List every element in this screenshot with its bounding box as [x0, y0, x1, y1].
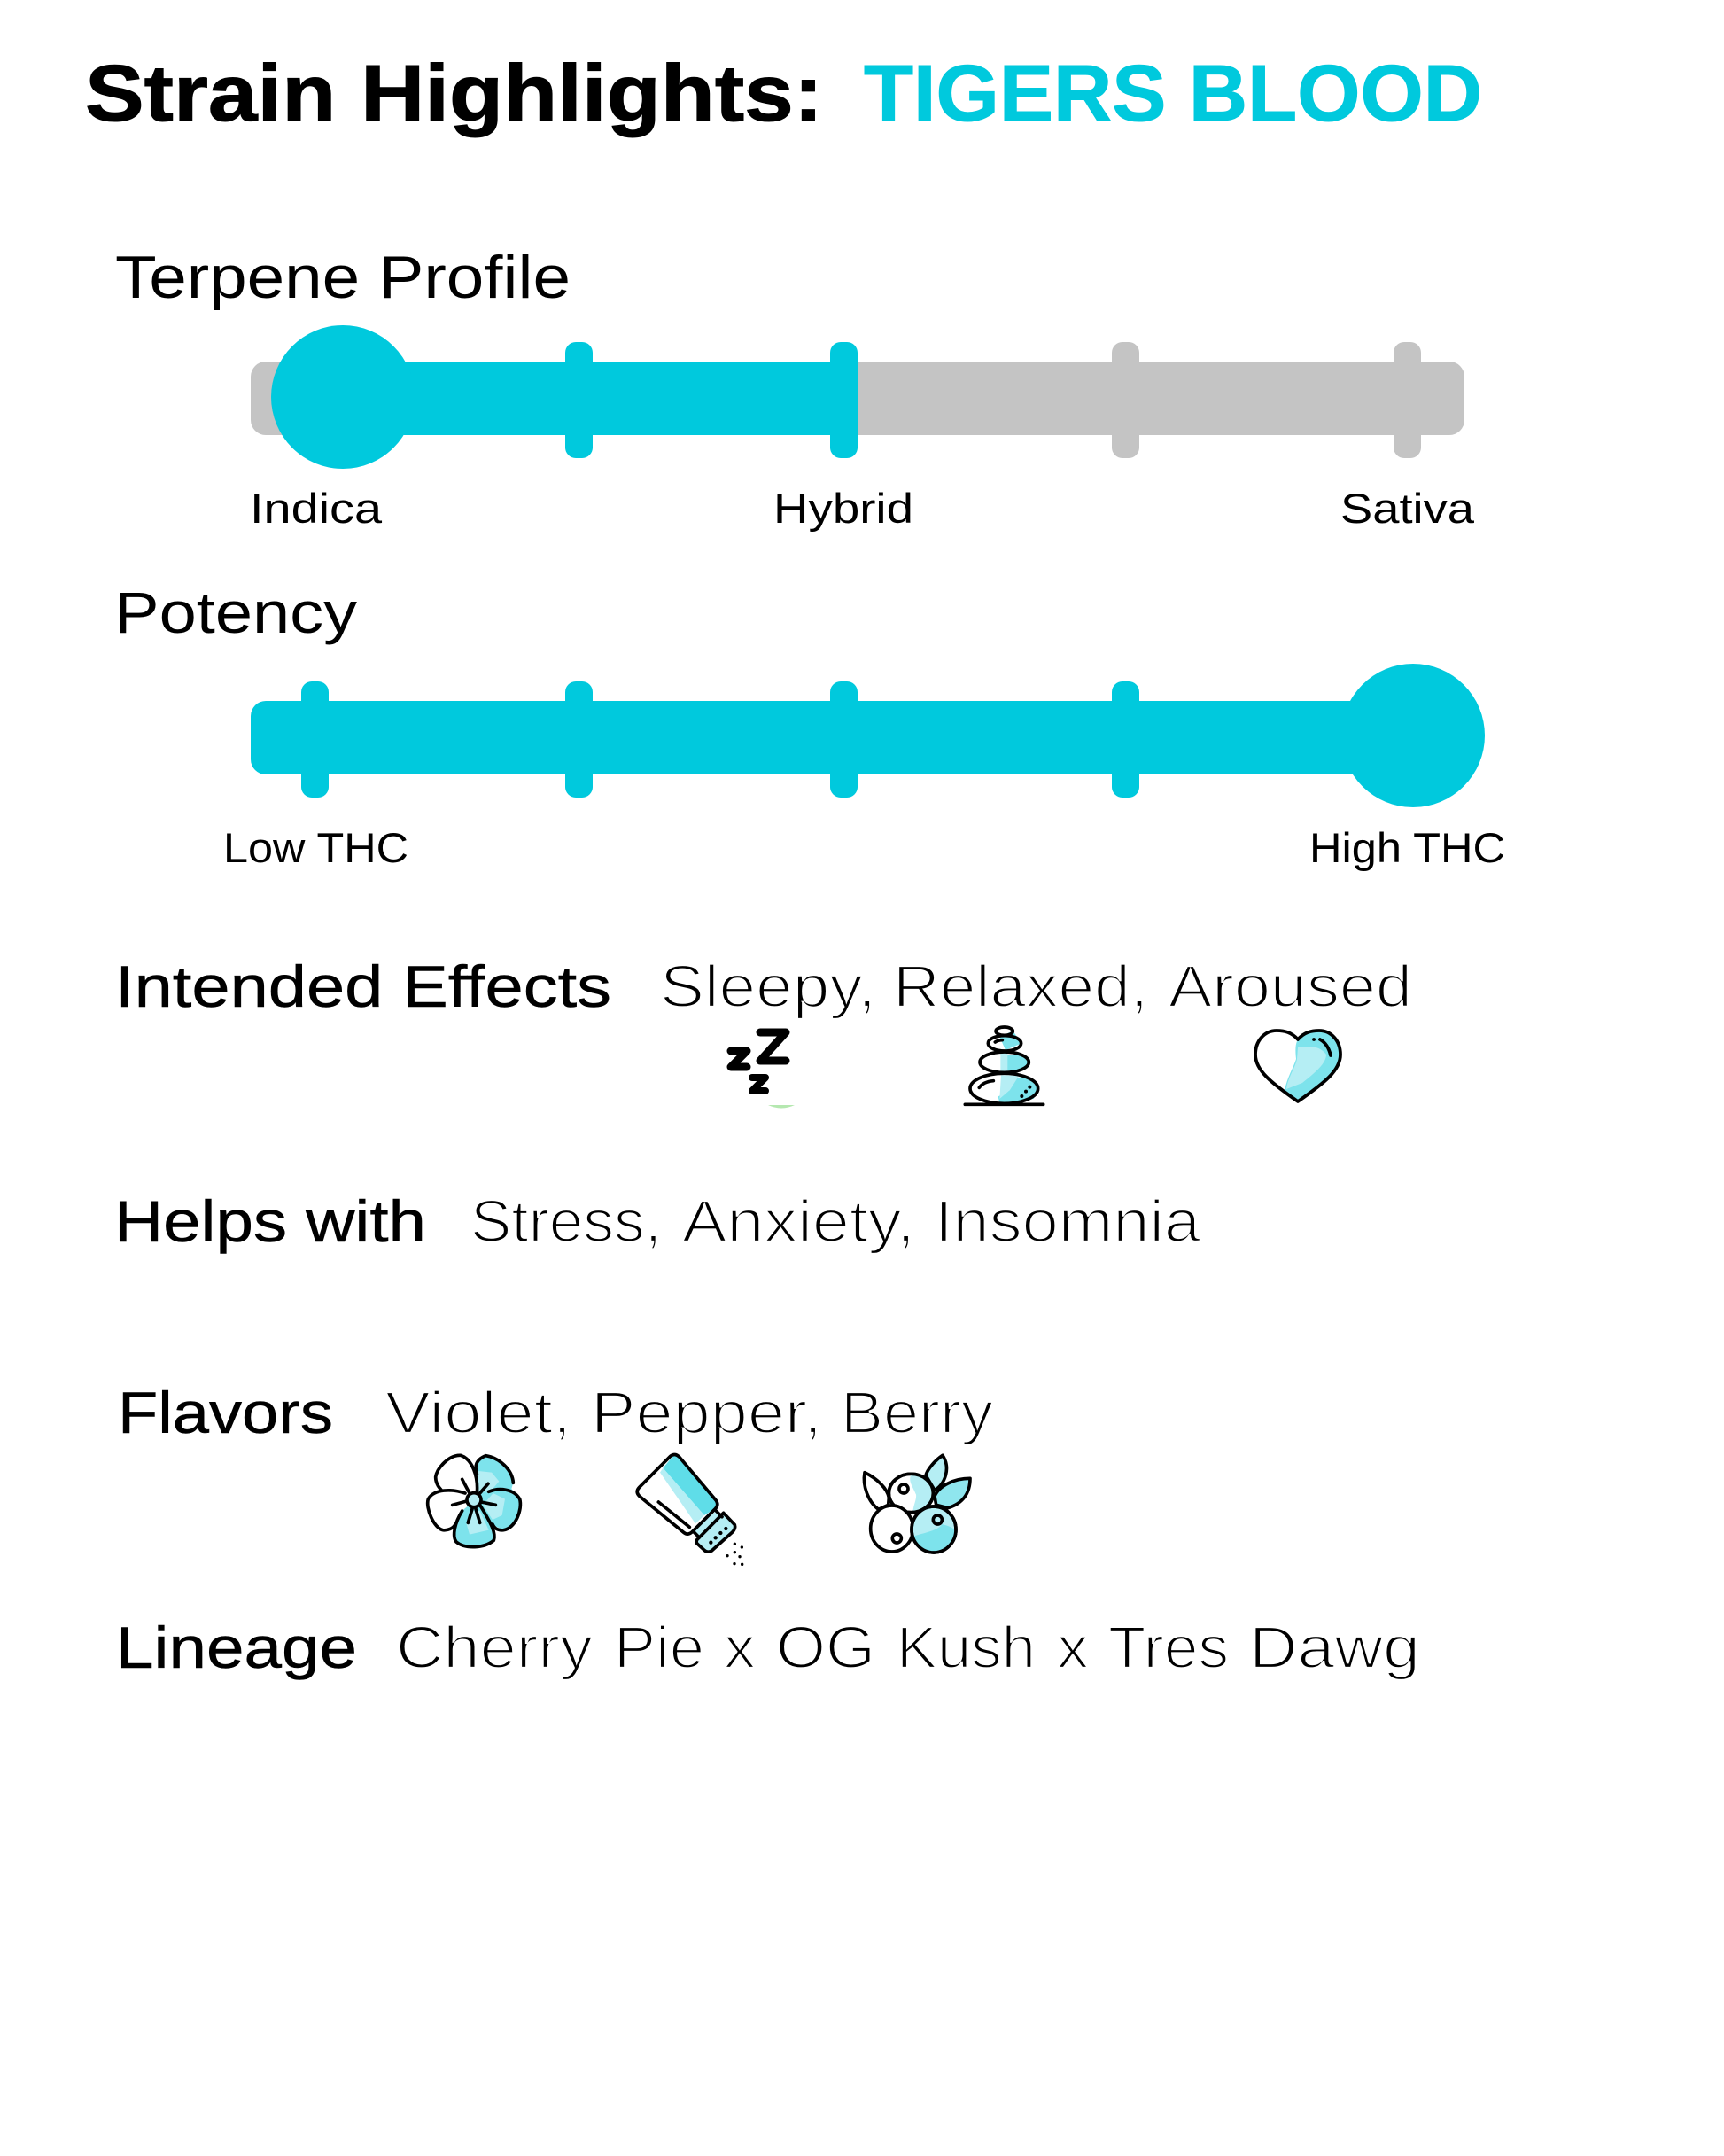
heading: potency: Potency — [114, 580, 357, 645]
heading: lineage: Lineage — [116, 1615, 357, 1680]
icon: heart — [1255, 1031, 1340, 1101]
panel: lineage — [116, 1615, 1420, 1681]
text: flavors list: Berry — [841, 1380, 994, 1446]
text: lineage list: Kush — [897, 1615, 1036, 1681]
icon: violet flower — [428, 1455, 520, 1547]
heading: flavors: Flavors — [118, 1380, 333, 1445]
panel: helps with — [114, 1188, 1201, 1255]
panel: flavors — [118, 1380, 994, 1564]
text: flavors list: Pepper, — [591, 1380, 822, 1446]
label: indica: Indica — [250, 485, 383, 532]
label: low thc: Low THC — [223, 824, 408, 871]
panel: terpene profile — [115, 244, 1475, 532]
title: Strain Highlights: — [85, 50, 823, 138]
text: lineage list: Dawg — [1249, 1615, 1420, 1681]
label: hybrid: Hybrid — [773, 485, 913, 532]
icon: berries — [864, 1455, 970, 1553]
slider: indica to sativa — [251, 325, 1464, 469]
title — [85, 50, 1482, 138]
text: conditions list — [470, 1188, 1201, 1255]
heading: terpene profile: Terpene Profile — [115, 244, 571, 311]
heading: intended effects: Intended Effects — [115, 953, 611, 1019]
title: TIGERS BLOOD — [864, 50, 1482, 138]
text: conditions list: Anxiety, — [682, 1188, 915, 1255]
panel: intended effects — [115, 953, 1412, 1108]
slider: low to high thc — [251, 664, 1485, 807]
text: lineage list: OG — [776, 1615, 875, 1681]
label: sativa: Sativa — [1340, 485, 1475, 532]
text: lineage list: Tres — [1108, 1615, 1229, 1681]
text: effects list — [660, 953, 1412, 1020]
text: lineage list: x — [724, 1615, 756, 1681]
text: flavors list: Violet, — [385, 1380, 571, 1446]
label: high thc: High THC — [1309, 824, 1505, 871]
icon: pepper shaker — [637, 1454, 742, 1564]
panel: potency — [114, 580, 1505, 871]
icon: sleeping z letters — [731, 1032, 795, 1108]
icon: stacked stones — [965, 1027, 1044, 1104]
text: flavors list — [385, 1380, 994, 1446]
text: lineage list: Cherry — [396, 1615, 594, 1681]
text: lineage list — [396, 1615, 1420, 1681]
text: conditions list: Stress, — [470, 1188, 662, 1255]
text: lineage list: Pie — [614, 1615, 704, 1681]
text: effects list: Relaxed, — [893, 953, 1148, 1020]
text: effects list: Sleepy, — [660, 953, 876, 1020]
text: effects list: Aroused — [1169, 953, 1412, 1020]
text: lineage list: x — [1057, 1615, 1089, 1681]
text: conditions list: Insomnia — [935, 1188, 1201, 1255]
heading: helps with: Helps with — [114, 1188, 426, 1254]
